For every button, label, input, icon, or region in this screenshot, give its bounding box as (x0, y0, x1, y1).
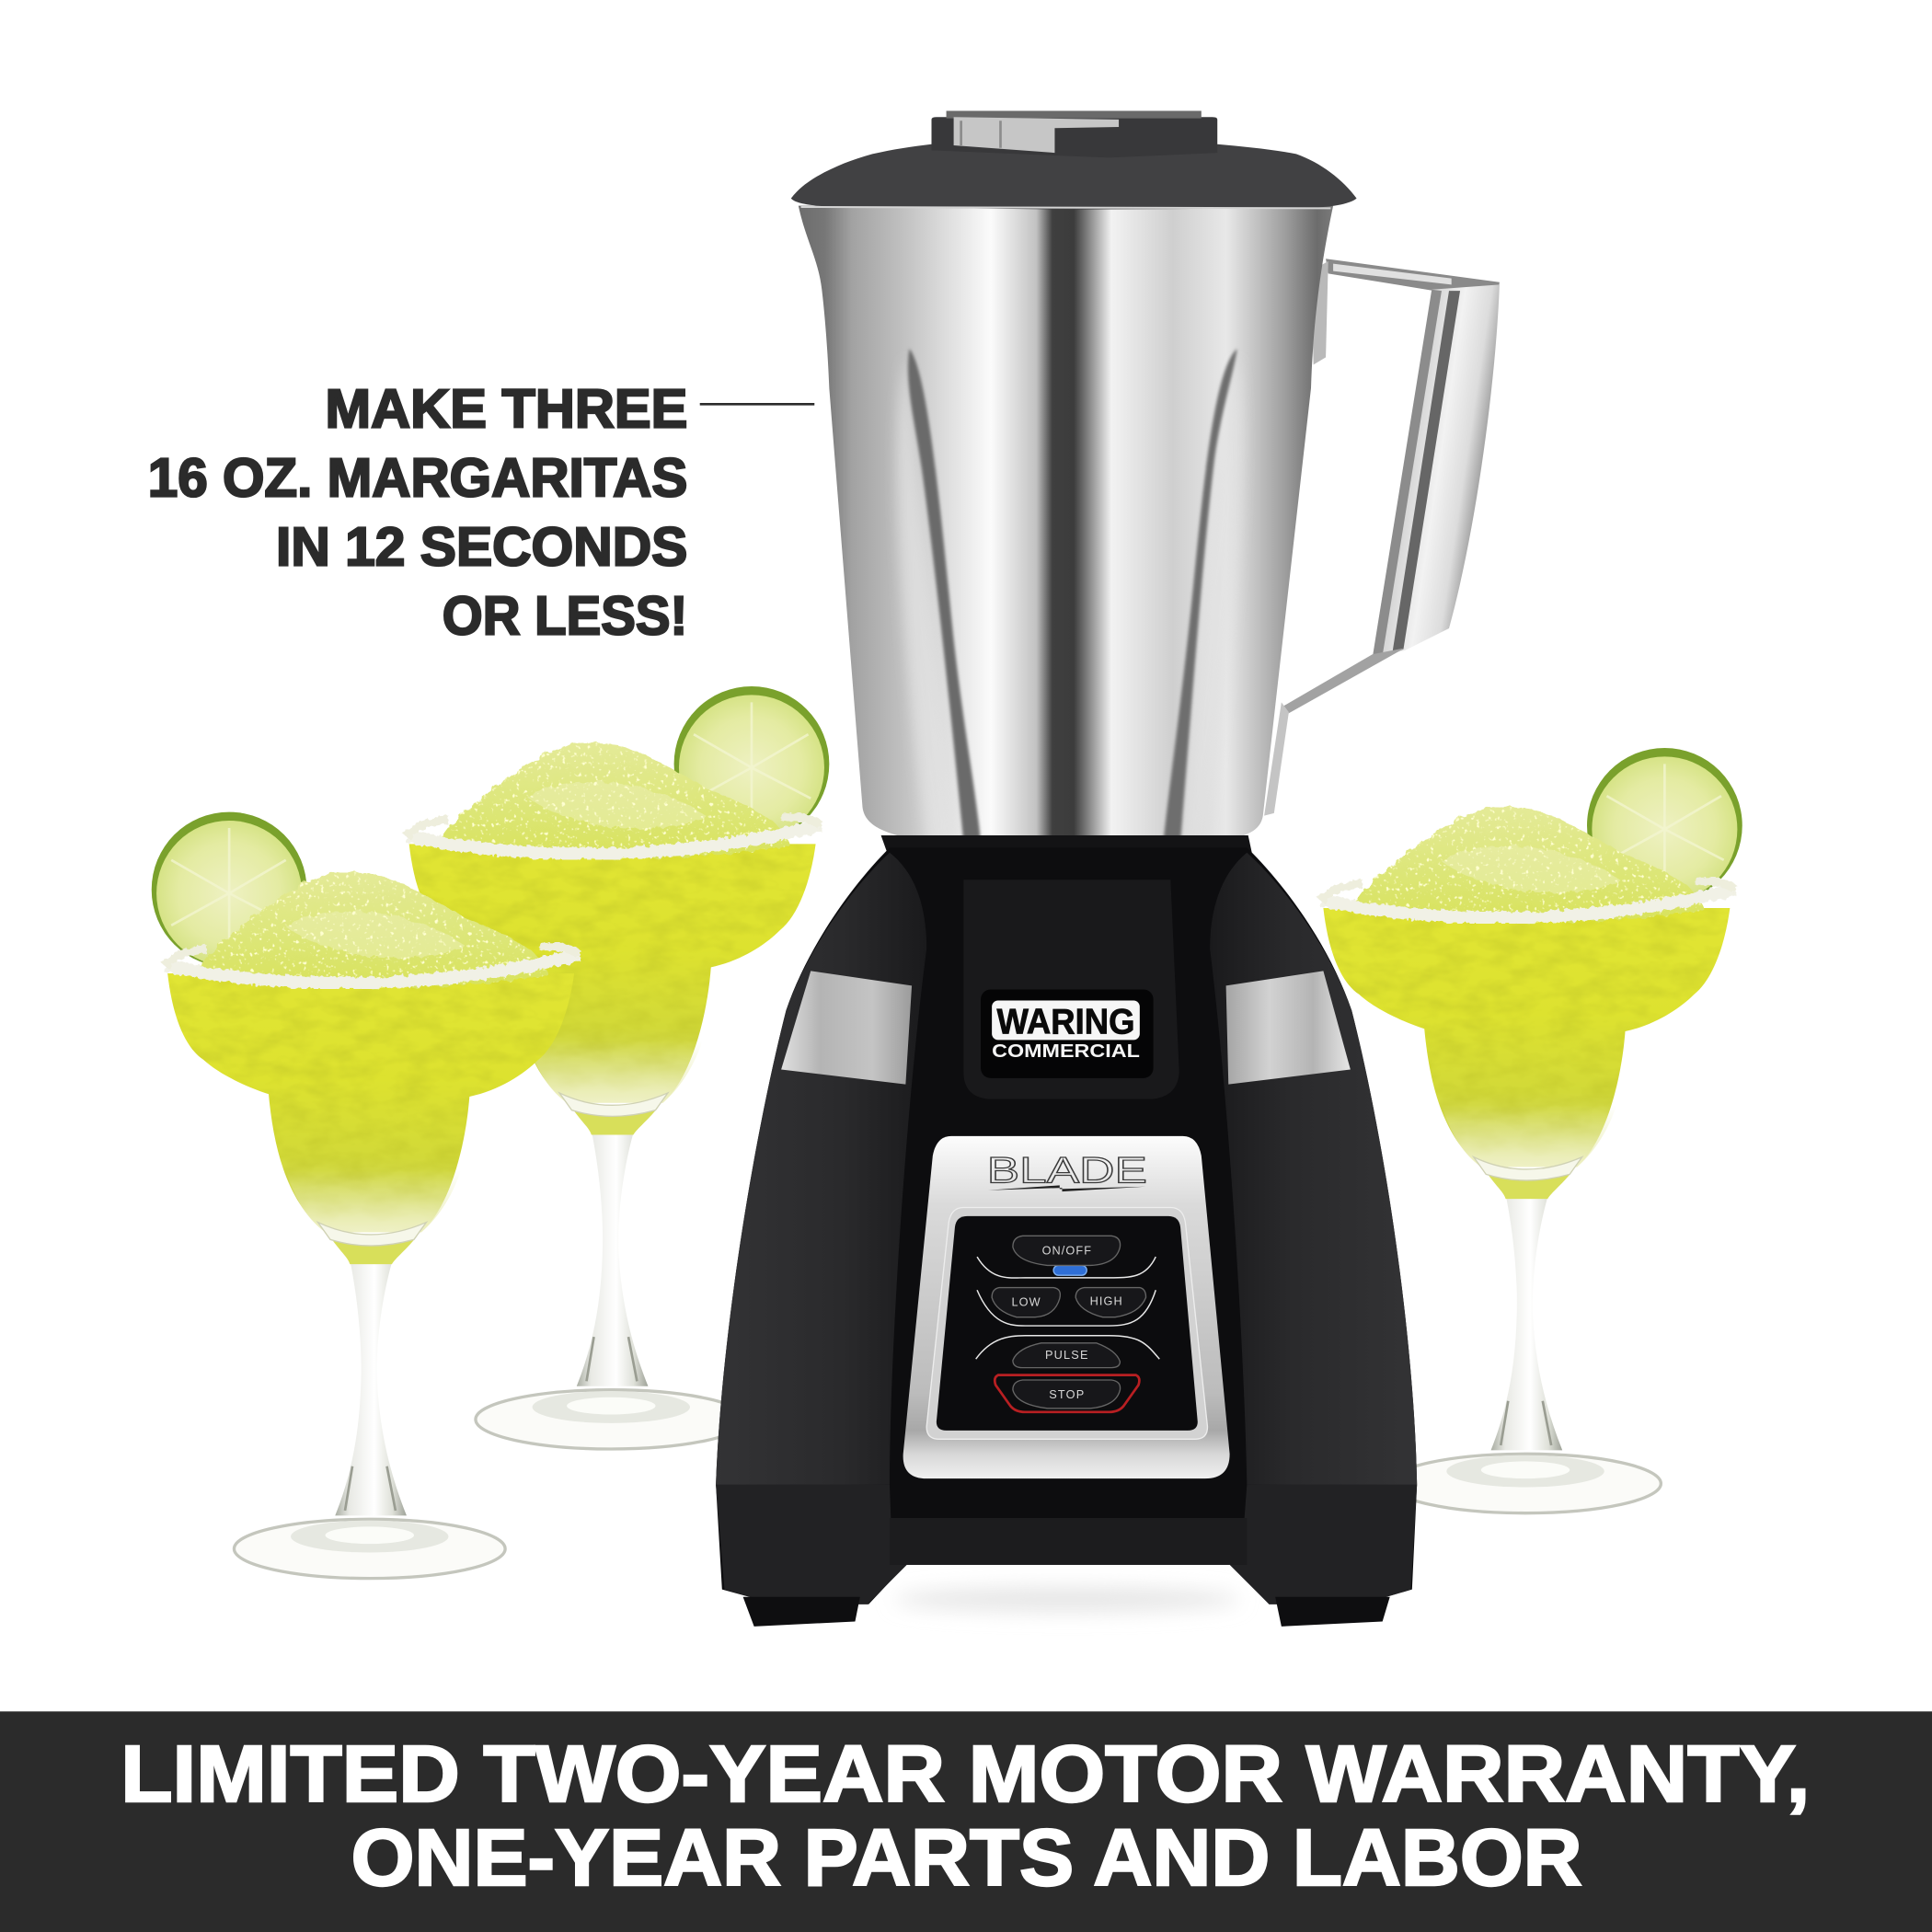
blender jar handle (1264, 259, 1500, 816)
callout: make three margaritas: IN 12 SECONDS (276, 518, 687, 578)
on/off button: ON/OFF (1042, 1243, 1092, 1257)
logo: Waring Commercial: COMMERCIAL (992, 1041, 1140, 1062)
pulse button: PULSE (1045, 1348, 1089, 1362)
on/off button (1013, 1236, 1121, 1265)
low button: LOW (1012, 1295, 1041, 1309)
control panel chrome (903, 1136, 1230, 1478)
silver band left (781, 971, 912, 1085)
callout: make three margaritas: 16 OZ. MARGARITAS (148, 449, 687, 509)
logo: Waring Commercial (981, 989, 1154, 1078)
blender lid (791, 111, 1357, 210)
stop button: STOP (1049, 1387, 1085, 1401)
button trim lines (976, 1257, 1159, 1359)
indicator LED (1053, 1265, 1087, 1275)
warranty heading: ONE-YEAR PARTS AND LABOR (351, 1813, 1582, 1903)
blade wordmark: BLADE (987, 1150, 1147, 1191)
blender floor shadow (894, 1587, 1239, 1612)
high button (1075, 1288, 1146, 1317)
blender base body (716, 835, 1417, 1627)
silver band right (1226, 971, 1351, 1085)
logo recess (963, 880, 1179, 1099)
icon: margarita glass, right (1321, 748, 1742, 1513)
blender (716, 111, 1500, 1627)
icon: margarita glass, front left (152, 812, 579, 1579)
icon: margarita glass, back middle (407, 686, 829, 1449)
warranty heading (121, 1730, 1810, 1903)
low button (992, 1288, 1060, 1317)
logo: Waring Commercial: WARING (996, 1003, 1134, 1042)
pulse button (1013, 1343, 1120, 1368)
stop red outline (995, 1375, 1139, 1412)
callout: make three margaritas: OR LESS! (443, 587, 687, 647)
warranty heading: LIMITED TWO-YEAR MOTOR WARRANTY, (121, 1730, 1810, 1819)
callout: make three margaritas (148, 380, 687, 647)
stop button (1013, 1380, 1121, 1409)
callout leader line (700, 403, 814, 405)
control panel touch screen (937, 1216, 1198, 1431)
high button: HIGH (1090, 1294, 1123, 1307)
footer banner (0, 1711, 1932, 1932)
blender steel jar (799, 206, 1333, 845)
callout: make three margaritas: MAKE THREE (326, 380, 687, 440)
